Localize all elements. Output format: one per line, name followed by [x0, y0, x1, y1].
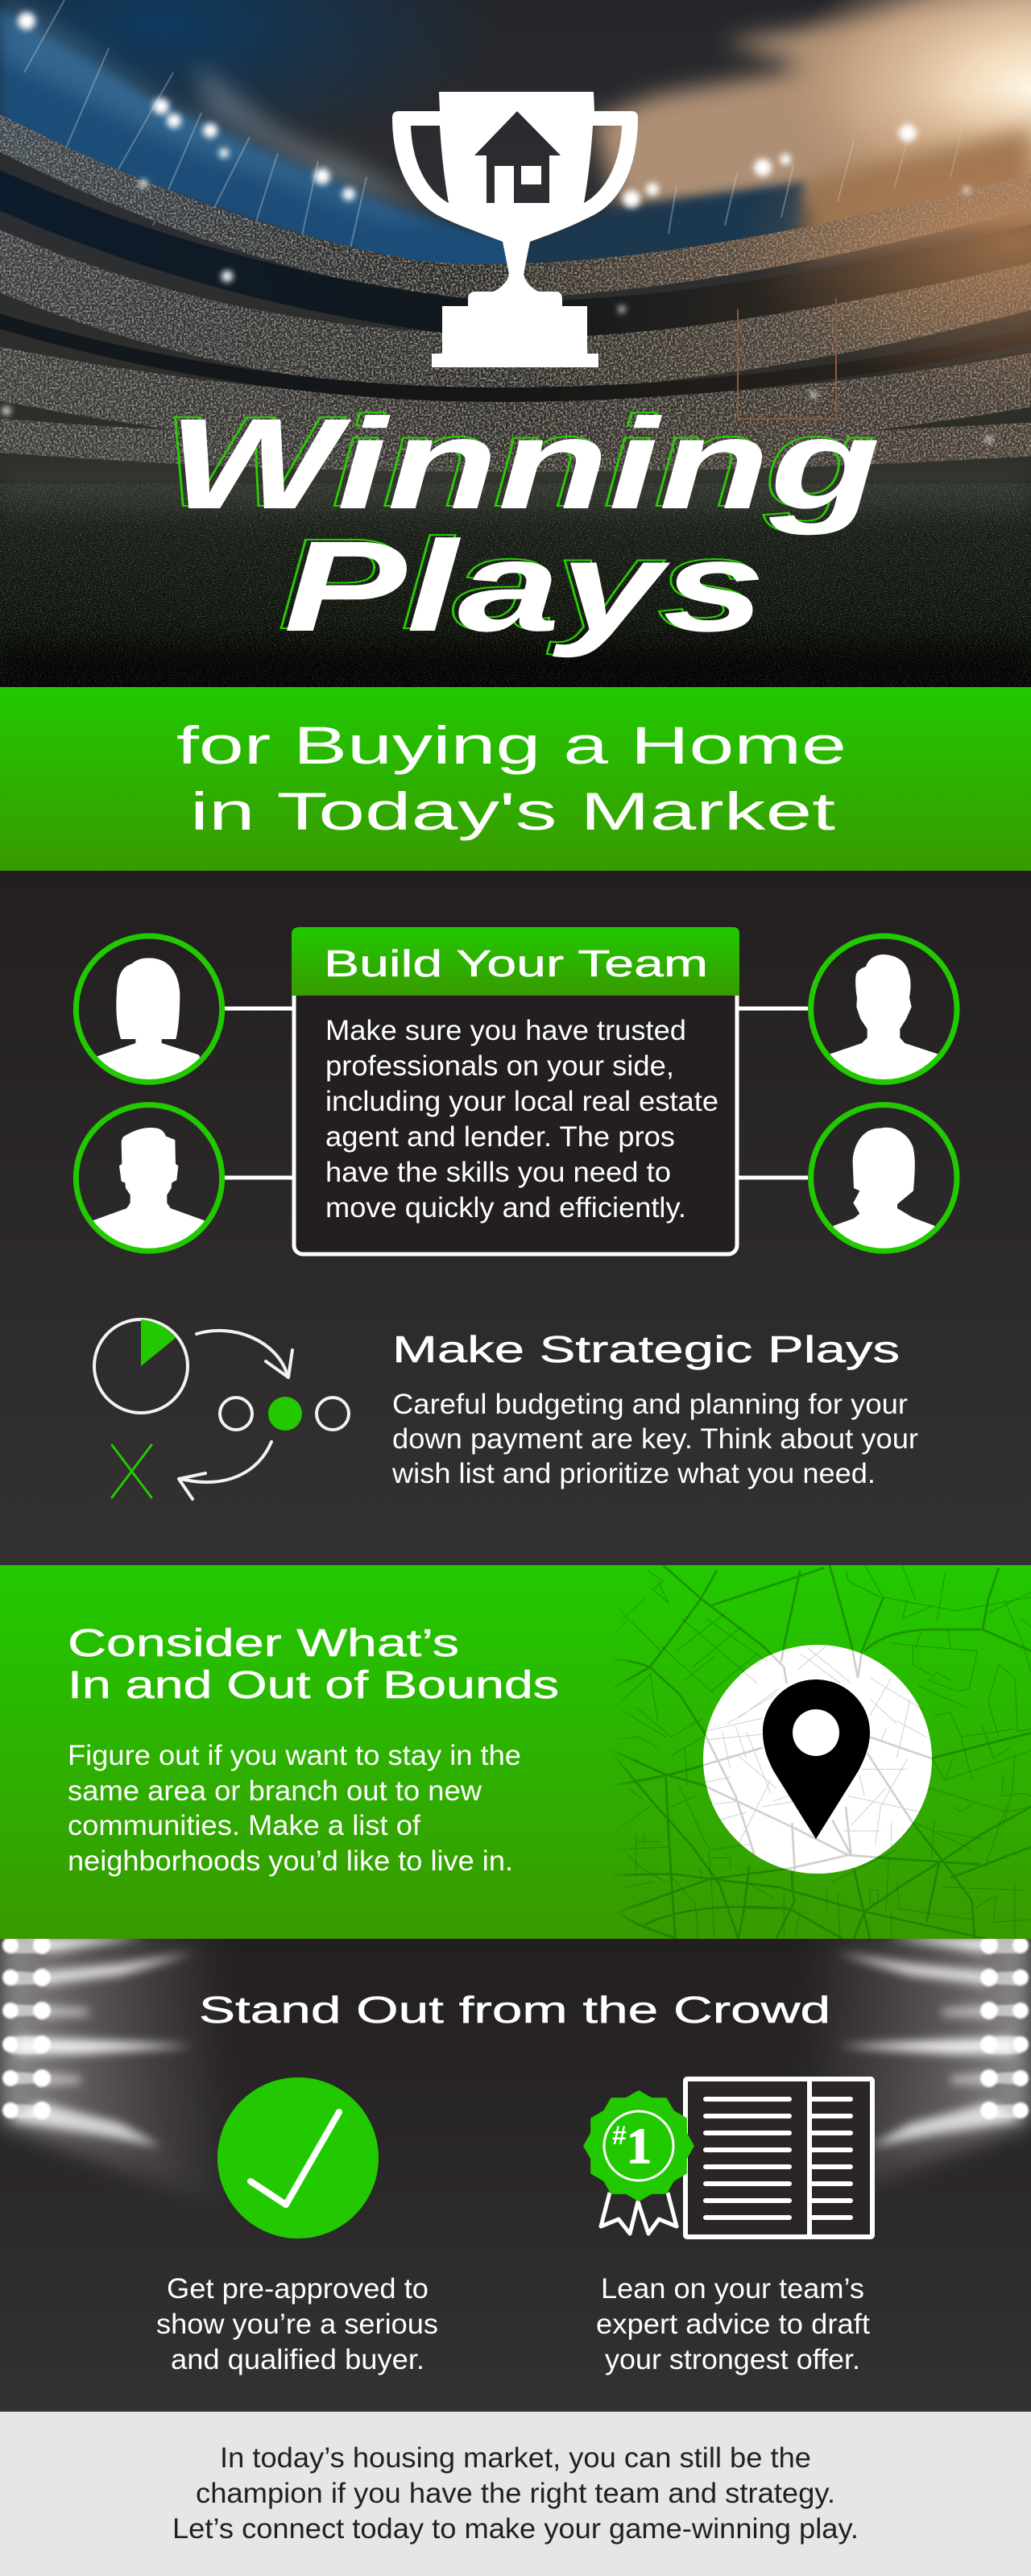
connector lines: [225, 1008, 808, 1178]
title: Winning Plays: Plays: [278, 511, 760, 656]
map background: [612, 1565, 1031, 1939]
text: team body: [325, 1014, 718, 1224]
text: pre-approved: show you’re a serious: [156, 2308, 438, 2340]
text: strategic plays body: down payment are key. Think about your: [392, 1423, 918, 1455]
text: closing call to action: [172, 2441, 859, 2545]
stadium lights left: [0, 1939, 206, 2191]
subtitle text: [176, 715, 847, 841]
panel: dark team and strategy section: [0, 871, 1031, 1565]
text: expert advice: [596, 2272, 870, 2375]
text: team body: including your local real estate: [325, 1085, 718, 1117]
heading: build your team: Build Your Team: [324, 942, 708, 984]
heading: stand out: Stand Out from the Crowd: [199, 1989, 830, 2031]
panel: stand out from the crowd: [0, 1933, 1031, 2412]
panel: closing message: [0, 2412, 1031, 2576]
person icon: top right: [811, 936, 957, 1087]
person icon: top left: [76, 936, 222, 1087]
text: closing call to action: Let’s connect today to make your game-winning play.: [172, 2512, 859, 2545]
icon: check mark circle: [217, 2077, 379, 2238]
panel: in and out of bounds: [0, 1565, 1031, 1939]
text: team body: move quickly and efficiently.: [325, 1191, 686, 1224]
text: bounds body: communities. Make a list of: [68, 1809, 420, 1841]
text: team body: have the skills you need to: [325, 1156, 671, 1188]
text: closing call to action: In today’s housing market, you can still be the: [220, 2441, 811, 2474]
title: Winning Plays: Plays: [284, 514, 765, 658]
text: expert advice: your strongest offer.: [605, 2343, 860, 2375]
heading: consider what's in and out of bounds: Consider What’s: [68, 1622, 459, 1665]
icon: trophy with house cutout: [392, 92, 638, 367]
icon: location pin on map circle: [703, 1645, 932, 1874]
heading: consider what's in and out of bounds: In and Out of Bounds: [68, 1664, 559, 1707]
text: strategic plays body: [391, 1388, 918, 1489]
text: pre-approved: [156, 2272, 438, 2375]
text: expert advice: Lean on your team’s: [601, 2272, 864, 2305]
title: Winning Plays: [162, 389, 880, 658]
text: closing call to action: champion if you have the right team and strategy.: [196, 2477, 835, 2509]
text: pre-approved: and qualified buyer.: [171, 2343, 424, 2375]
hero stadium photo background: [0, 0, 1031, 687]
text: bounds body: neighborhoods you’d like to live in.: [68, 1845, 513, 1877]
icon: offer document with #1 ribbon: [583, 2079, 872, 2237]
text: bounds body: [68, 1739, 521, 1877]
text: expert advice: expert advice to draft: [596, 2308, 870, 2340]
panel: subtitle band: [0, 687, 1031, 871]
title: Winning Plays: Winning: [168, 391, 880, 536]
panel: build your team box: [292, 927, 739, 1254]
icon: playbook diagram: [94, 1319, 349, 1499]
text: team body: agent and lender. The pros: [325, 1120, 675, 1153]
text: team body: professionals on your side,: [325, 1050, 674, 1082]
text: strategic plays body: wish list and prioritize what you need.: [391, 1457, 876, 1489]
text: bounds body: Figure out if you want to stay in the: [68, 1739, 521, 1771]
text: bounds body: same area or branch out to new: [68, 1775, 482, 1807]
text: team body: Make sure you have trusted: [325, 1014, 686, 1046]
subtitle text: in Today's Market: [190, 781, 835, 841]
text: strategic plays body: Careful budgeting and planning for your: [392, 1388, 908, 1420]
icon: offer document with #1 ribbon: #: [612, 2121, 627, 2150]
heading: consider what's in and out of bounds: [68, 1622, 559, 1707]
stadium fence lines: [24, 0, 967, 266]
text: pre-approved: Get pre-approved to: [167, 2272, 429, 2305]
person icon: bottom left: [76, 1105, 222, 1257]
stadium lights right: [825, 1939, 1031, 2186]
person icon: bottom right: [811, 1105, 957, 1257]
subtitle text: for Buying a Home: [176, 715, 847, 775]
title: Winning Plays: Winning: [162, 389, 875, 533]
heading: make strategic plays: Make Strategic Plays: [392, 1328, 900, 1370]
icon: offer document with #1 ribbon: 1: [627, 2119, 652, 2174]
